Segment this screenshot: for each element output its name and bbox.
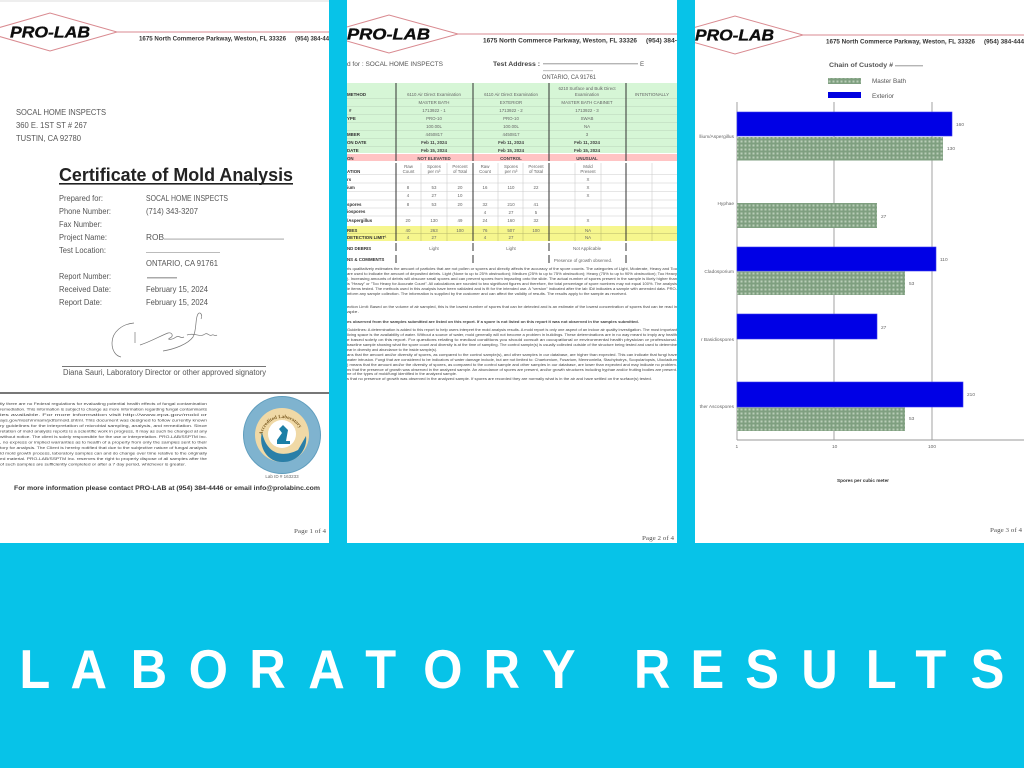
bars: other basidiospores: r Basidiospores [701,337,735,343]
banner heading: laboratory results: LABORATORY RESULTS [19,639,1004,700]
table: spore counts [347,163,677,226]
notes and interpretation guidelines: e based solely on this report. For questions relating to medical conditions you should consult an occupational or environmental health physician or professional. [347,337,677,342]
table: sample information: MBER [347,132,361,137]
report details: February 15, 2024 [146,298,209,307]
table: sample information: 100.00L [503,124,519,129]
table: total spores and detection limit: 100 [456,228,464,233]
table: total spores and detection limit: DETECTION LIMIT¹ [347,235,387,240]
table: sample information: PRO-10 [503,116,519,121]
page number: Page 3 of 4 [990,527,1023,534]
notes and interpretation guidelines: ie items tested. The methods used in this analysis have been validated and is fit for the intended use. A "version" indicated after the lab ID# indicates a sample with amended data. PRO- [347,286,678,291]
icon: accredited laboratory seal: Lab ID # 163233 [265,474,299,479]
table: sample information: Feb 15, 2024 [574,148,601,153]
table: sample information: 6210 Surface and Bulk Direct [558,86,616,91]
table: sample information: 6110 Air Direct Examination [484,92,538,97]
notes and interpretation guidelines: ans that the amount and/or diversity of spores, as compared to the control sample(s), and other samples in our database, are higher than expected. This can indicate that fungi have [347,352,677,357]
client address block: SOCAL HOME INSPECTS [16,108,106,117]
notes and interpretation guidelines: ection Limit: Based on the volume of air sampled, this is the lowest number of spores that can be detected and is an estimate of the lowest concentration of spores that can be read in [347,304,677,309]
table: spore counts: 210 [507,202,515,207]
notes and interpretation guidelines: aple. [347,309,359,314]
bars: penicillium and aspergillus: llium/Aspergillus [699,134,735,140]
prepared for and test address: Test Address : [493,61,540,68]
report details: SOCAL HOME INSPECTS [146,194,228,203]
bars: penicillium and aspergillus: 130 [947,146,955,152]
table: total spores and detection limit: 507 [507,228,515,233]
notes and interpretation guidelines: living space is the availability of water. Without a source of water, mold generally will not become a problem in buildings. These determinations are in no way meant to imply any health [347,332,677,337]
table: interpretation row: CONTROL [500,156,522,161]
table: sample information: 4450817 [425,132,443,137]
logo: PRO-LAB header: 1675 North Commerce Parkway, Weston, FL 33326 [826,40,976,46]
notes and interpretation guidelines: ) means that the amount and/or the diversity of spores, as compared to the control sample and other samples in our database, are lower than expected and may indicate no problem. [347,362,677,367]
bars: other ascospores: ther Ascospores [700,404,735,410]
report details: (714) 343-3207 [146,207,198,216]
table: spore counts: 130 [430,218,438,223]
bars: other basidiospores [701,314,887,343]
bar chart: spores per cubic meter [699,102,1024,483]
bars: hyphae: Hyphae [717,201,734,207]
table: spore counts: Count [403,169,415,174]
table: total spores and detection limit: 100 [532,228,540,233]
table: spore counts: 41 [534,202,539,207]
logo: PRO-LAB header: PRO-LAB [695,28,774,44]
report details: Fax Number: [59,220,102,229]
table: spore counts: Spores [427,164,442,169]
report details: Phone Number: [59,207,111,216]
table: sample information: 1713922 - 1 [422,108,446,113]
table: total spores and detection limit: 4 [484,235,487,240]
report details: ONTARIO, CA 91761 [146,259,218,268]
table: spore counts: 5 [535,210,538,215]
bars: cladosporium: 53 [909,281,915,287]
table: spore counts: Mold [583,164,593,169]
table: sample information: DATE [347,148,359,153]
logo: PRO-LAB header: (954) 384-44 [295,36,330,42]
icon: accredited laboratory seal: Accredited Laboratory [259,414,302,436]
table: sample information: INTENTIONALLY [635,92,669,97]
legend: Exterior [872,93,894,100]
bars: cladosporium: 110 [940,257,948,263]
table: spore counts: 32 [534,218,539,223]
disclaimer fine print: ays.gov/niosh/nmam/pdfs/mold.shtml. This document was designed to follow currently known [0,418,207,422]
table: spore counts: /Aspergillus [347,218,373,223]
title: certificate of mold analysis: Certificate of Mold Analysis [59,164,293,185]
table: total spores and detection limit: 27 [509,235,514,240]
table: sample information: Feb 11, 2024 [498,140,524,145]
legend: Master Bath [872,78,907,85]
table: interpretation row: UNUSUAL [576,156,598,161]
table: sample information: 1713922 - 2 [499,108,523,113]
table: spore counts: 27 [509,210,514,215]
disclaimer fine print: retation of mold analysis reports is a scientific work in progress, it may as such be changed at any [0,428,207,434]
table: sample information: MASTER BATH [419,100,449,105]
table: sample information: Feb 11, 2024 [574,140,600,145]
table: interpretation row [347,154,677,161]
table: sample information [347,83,677,153]
report details: February 15, 2024 [146,285,209,294]
logo: PRO-LAB header: (954) 384-444 [984,40,1024,46]
bars: hyphae: 27 [881,214,887,220]
table: spore counts: 20 [458,185,463,190]
table: spore counts: per m³ [505,169,518,174]
notes and interpretation guidelines [347,266,678,381]
table: spore counts: of Total [453,169,467,174]
disclaimer fine print: , no express or implied warranties as to health of a property from only the samples sent to their [0,440,208,444]
table: spore counts: X [587,185,590,190]
table: spore counts: 8 [407,185,410,190]
table: sample information: Feb 11, 2024 [421,140,447,145]
table: spore counts: 20 [458,202,463,207]
notes and interpretation guidelines: inform any sample collection. The information is supplied by the customer and can affect the validity of results. The results apply to the sample as received. [347,291,627,296]
report details: Prepared for: [59,194,103,203]
notes and interpretation guidelines: Guidelines: A determination is added to this report to help users interpret the mold analysis results. A mold report is only one aspect of an indoor air quality investigation. The most important [347,327,678,332]
report details: Test Location: [59,246,106,255]
x axis labels: 10 [832,444,838,450]
x axis labels [736,445,936,448]
disclaimer fine print: ies available. For more information visit http://www.epa.gov/mold or [0,412,208,417]
report details: Project Name: [59,233,107,242]
table: spore counts: 22 [534,185,539,190]
table: sample information: Feb 15, 2024 [421,148,448,153]
logo: PRO-LAB header: PRO-LAB [10,24,90,42]
disclaimer fine print: ed material. PRO-LAB/SSPTM Inc. reserves the right to properly dispose of all samples after the [0,456,207,461]
table: spore counts: rs [347,177,352,182]
table: spore counts: X [587,177,590,182]
contact line: For more information please contact PRO-LAB at (954) 384-4446 or email info@prolabinc.com [14,485,320,492]
table: background debris and comments: Light [506,246,517,251]
table: total spores and detection limit: 263 [430,228,438,233]
table: sample information: NA [584,124,590,129]
notes and interpretation guidelines: ns that the presence of growth was observed in the analyzed sample. An abundance of spores are present, and/or growth structures including hyphae and/or fruiting bodies are present. [347,367,677,372]
report details: Report Number: [59,272,111,281]
bars: cladosporium: Cladosporium [704,269,734,275]
table: spore counts: spores [347,202,362,207]
prepared for and test address: ONTARIO, CA 91761 [542,74,597,81]
chain of custody: Chain of Custody # [829,62,893,69]
logo: PRO-LAB header [0,13,330,51]
table: spore counts: 20 [406,218,411,223]
notes and interpretation guidelines: ). Increasing amounts of debris will obscure small spores and can prevent spores from impacting onto the slide. The actual number of spores present in the sample is likely higher than [347,276,677,281]
table: total spores and detection limit: NA [585,228,591,233]
logo: PRO-LAB header [668,16,1024,54]
table: spore counts: 53 [432,185,437,190]
chain of custody [829,62,923,68]
table: sample information: YPE [347,116,356,121]
table: total spores and detection limit: RIES [347,228,357,233]
table: total spores and detection limit: 27 [432,235,437,240]
report details: Report Date: [59,298,102,307]
bars: other ascospores: 210 [967,392,975,398]
logo: PRO-LAB header: (954) 384- [646,38,677,44]
table: spore counts: iospores [347,209,366,214]
table: spore counts: 4 [407,193,410,198]
table: spore counts: 49 [458,218,463,223]
page number: Page 1 of 4 [294,528,327,535]
table: spore counts: Raw [404,164,414,169]
panel: certificate of mold analysis page [0,0,329,543]
notes and interpretation guidelines: ris qualitatively estimates the amount of particles that are not pollen or spores and directly affects the accuracy of the spore counts. The categories of Light, Moderate, Heavy and Too [347,266,677,271]
table: sample information: # [349,108,352,113]
table: spore counts: 16 [483,185,488,190]
prepared for and test address: d for : SOCAL HOME INSPECTS [347,61,443,68]
table: spore counts: Present [580,169,596,174]
page number: Page 2 of 4 [642,535,675,542]
logo: PRO-LAB header: PRO-LAB [347,26,430,44]
notes and interpretation guidelines: ne of the types of mold/fungi identified in the analyzed sample. [347,371,457,376]
x axis title: Spores per cubic meter [837,478,889,483]
table: spore counts: Percent [452,164,468,169]
bars: cladosporium [704,247,948,295]
report details [59,194,284,307]
table: background debris and comments: ND DEBRIS [347,246,371,251]
table: sample information: 100.00L [426,124,442,129]
signature [112,313,217,357]
table: spore counts: 110 [508,185,515,190]
disclaimer fine print: of such samples are sufficiently completed or after a 7 day period, whichever is greater. [0,462,186,466]
table: background debris and comments [347,246,612,263]
table: spore counts: X [587,218,590,223]
legend [828,78,907,100]
disclaimer fine print: without notice. The client is solely responsible for the use or interpretation. PRO-LAB/SSPTM Inc. [0,434,207,439]
client address block [16,108,106,143]
panel: spore analysis table page [322,0,678,543]
table: spore counts: 53 [432,202,437,207]
notes and interpretation guidelines: es observed from the samples submitted are listed on this report. If a spore is not listed on this report it was not observed in the samples submitted. [347,319,639,324]
notes and interpretation guidelines: water intrusion. Fungi that are considered to be indicators of water damage include, but are not limited to: Chaetomium, Fusarium, Memnoniella, Stachybotrys, Scopulariopsis, Ulocladium [347,357,677,362]
notes and interpretation guidelines: s that no presence of growth was observed in the analyzed sample. If spores are recorded they are normally what is in the air and have settled on the surface(s) tested. [347,376,652,381]
table: spore counts: 32 [483,202,488,207]
table: background debris and comments: NS & COMMENTS [347,257,384,262]
table: background debris and comments: Presence of growth observed. [554,258,612,263]
table: spore counts: X [587,193,590,198]
table: sample information: 6110 Air Direct Examination [407,92,461,97]
table: background debris and comments: Light [429,246,440,251]
table: spore counts: ATION [347,169,360,174]
bars: other basidiospores: 27 [881,325,887,331]
notes and interpretation guidelines: are used to indicate the amount of deposited debris. Light (None to up to 25% obstruction); Medium (25% to up to 75% obstruction); Heavy (75% to up to 90% obstruction); Too Heavy [347,271,677,276]
table: total spores and detection limit [347,226,677,241]
x axis labels: 100 [928,444,936,450]
disclaimer fine print [0,401,208,466]
table: sample information: 4450817 [502,132,520,137]
table: sample information: SWAB [581,116,593,121]
table: spore counts: of Total [529,169,543,174]
table: spore counts: 4 [484,210,487,215]
table: sample information: 3 [586,132,589,137]
table: spore counts: 27 [432,193,437,198]
table: spore counts: Percent [528,164,544,169]
bars: hyphae [717,201,887,228]
disclaimer fine print: ld mold growth process, laboratory samples can and do change over time relative to the originally [0,450,207,456]
table: spore counts: ium [347,185,355,190]
table: sample information: 1713922 - 3 [575,108,599,113]
table: spore counts: Raw [481,164,490,169]
disclaimer fine print: tly there are no Federal regulations for evaluating potential health effects of fungal contamination [0,401,207,406]
bars: penicillium and aspergillus: 160 [956,122,964,128]
x axis labels: 1 [736,444,738,450]
table: sample information: Feb 15, 2024 [498,148,525,153]
table: sample information: MASTER BATH CABINET [561,100,613,105]
section divider [0,392,329,394]
logo: PRO-LAB header [322,15,677,53]
table: spore counts: Count [479,169,492,174]
table: sample information: METHOD [347,92,366,97]
prepared for and test address [347,61,644,81]
report details: Received Date: [59,285,111,294]
table: total spores and detection limit: NA [585,235,591,240]
signatory line: Diana Sauri, Laboratory Director or other approved signatory [63,368,266,377]
logo: PRO-LAB header: 1675 North Commerce Parkway, Weston, FL 33326 [139,36,287,42]
table: interpretation row: NOT ELEVATED [417,156,451,161]
disclaimer fine print: remediation. This information is subject to change as more information regarding fungal contaminants [0,406,207,412]
table: sample information: ON DATE [347,140,367,145]
bars: penicillium and aspergillus [699,112,964,160]
disclaimer fine print: ry guidelines for the interpretation of microbial sampling, analysis, and remediation. Since [0,423,207,428]
icon: accredited laboratory seal [243,396,321,478]
table: sample information: EXTERIOR [500,100,522,105]
table: total spores and detection limit: 40 [406,228,411,233]
table: sample information: PRO-10 [426,116,442,121]
logo: PRO-LAB header: 1675 North Commerce Parkway, Weston, FL 33326 [483,38,638,44]
chart axes and gridlines [737,102,1024,440]
notes and interpretation guidelines: baseline sample showing what the spore count and diversity is at the time of sampling. The control sample(s) is usually collected outside of the structure being tested and used to determine [347,342,677,347]
table: interpretation row: ON [347,156,354,161]
table: background debris and comments: Not Applicable [573,246,602,251]
table: spore counts: 24 [483,218,488,223]
panel: spore chart page [668,0,1024,543]
bars: other ascospores: 53 [909,416,915,422]
table: total spores and detection limit: 4 [407,235,410,240]
bars: other ascospores [700,382,975,431]
report details: ROB [146,233,164,242]
table: spore counts: 160 [507,218,515,223]
table: total spores and detection limit: 76 [483,228,488,233]
disclaimer fine print: tory for analysis. The Client is hereby notified that due to the subjective nature of fungal analysis [0,445,207,450]
client address block: TUSTIN, CA 92780 [16,134,82,143]
prepared for and test address: E [640,61,644,68]
notes and interpretation guidelines: is "Heavy" or "Too Heavy for Accurate Count". All calculations are rounded to two significant figures and therefore, the total percentage of spore numbers may not equal 100%. The analysis [347,281,677,286]
table: spore counts: 8 [407,202,410,207]
table: spore counts: Spores [504,164,519,169]
notes and interpretation guidelines: ear in diversity and abundance to the inside sample(s). [347,347,437,352]
table column rules [396,83,626,263]
table: spore counts: 10 [458,193,463,198]
table: sample information: Examination [575,92,600,97]
client address block: 360 E. 1ST ST # 267 [16,121,87,130]
table: spore counts: per m³ [428,169,441,174]
